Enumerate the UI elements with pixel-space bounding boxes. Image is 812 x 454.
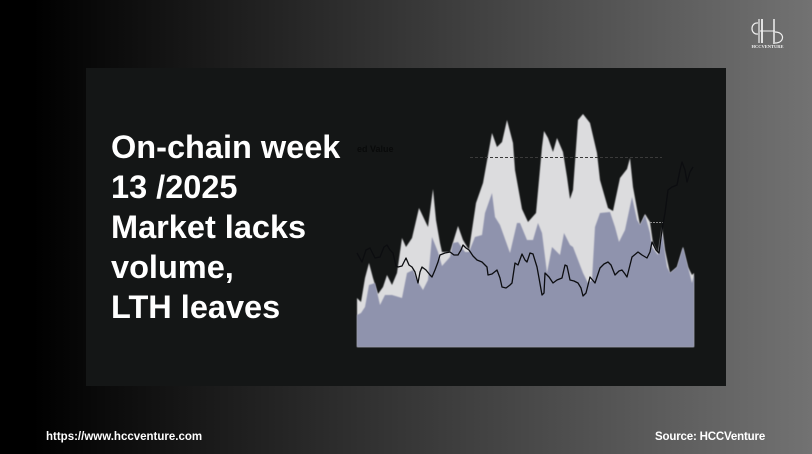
website footer: https://www.hccventure.com	[46, 431, 202, 443]
light grey area series	[357, 114, 694, 347]
title: 13 /2025	[111, 169, 238, 205]
dashed reference lines	[470, 158, 663, 222]
black price line	[357, 162, 693, 296]
source footer: Source: HCCVenture	[655, 431, 765, 443]
purple area series	[357, 193, 694, 347]
panel: dark content card	[86, 68, 726, 386]
title	[111, 129, 340, 325]
title: On-chain week	[111, 129, 340, 165]
icon: HCC Venture logo	[751, 19, 784, 49]
title: volume,	[111, 249, 234, 285]
title: LTH leaves	[111, 289, 280, 325]
icon: HCC Venture logo: HCCVENTURE	[751, 44, 784, 49]
chart faint label: ed Value	[357, 144, 394, 154]
title: Market lacks	[111, 209, 306, 245]
